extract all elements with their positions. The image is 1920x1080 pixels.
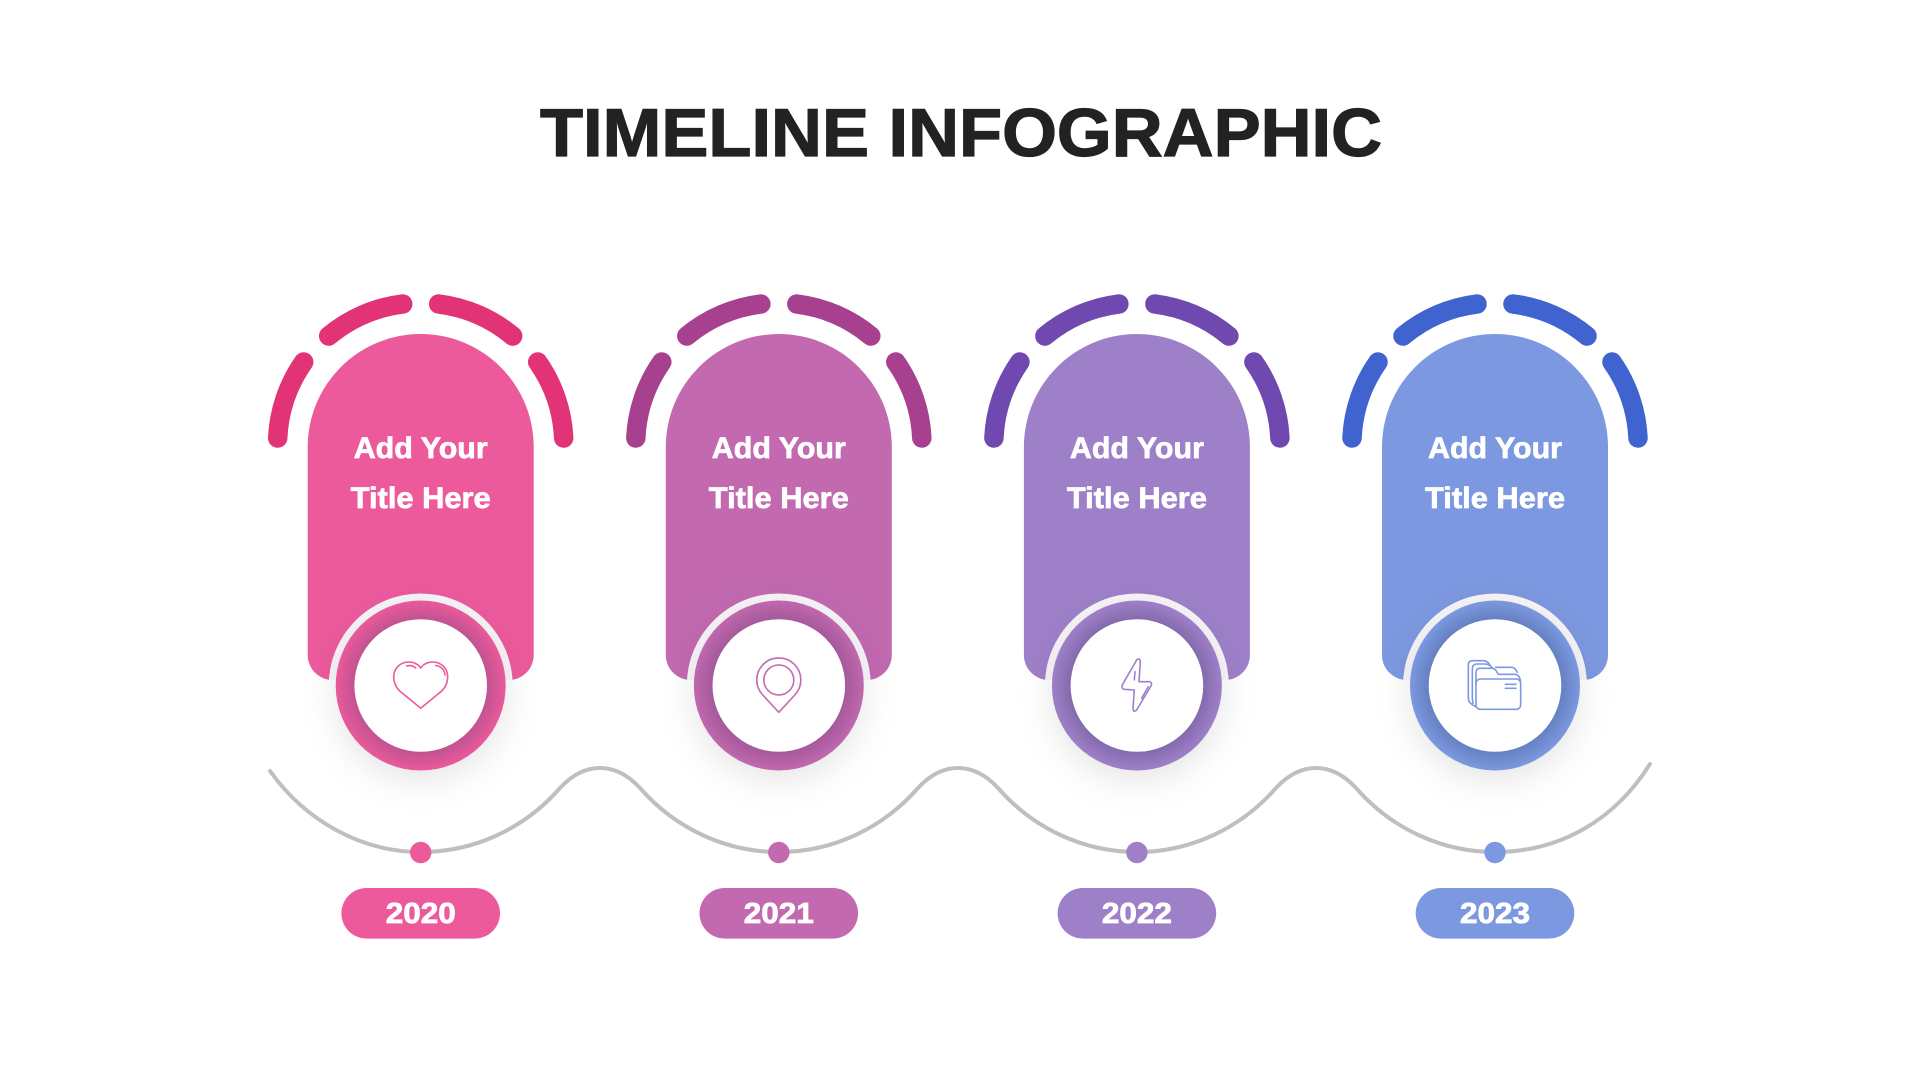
icon: map pin	[757, 658, 801, 712]
icon: heart	[394, 662, 448, 708]
card: 2020	[308, 334, 534, 680]
timeline dot: 2022	[1126, 842, 1148, 863]
title: TIMELINE INFOGRAPHIC	[540, 95, 1382, 171]
icon: lightning bolt	[1122, 659, 1152, 711]
card title: 2022: Title Here	[1067, 482, 1207, 515]
year pill: 2022: 2022	[1102, 898, 1172, 930]
card: 2021	[666, 334, 892, 680]
card title: 2021: Add Your	[712, 432, 846, 465]
badge: 2020	[328, 594, 514, 790]
badge: 2021	[686, 594, 872, 790]
card title: 2023: Add Your	[1428, 432, 1562, 465]
card title: 2020	[351, 432, 491, 515]
year pill: 2023	[1416, 888, 1574, 939]
year pill: 2023: 2023	[1460, 898, 1530, 930]
arcs: 2020	[278, 304, 564, 438]
year pill: 2021: 2021	[744, 898, 814, 930]
year pill: 2020: 2020	[386, 898, 456, 930]
year pill: 2020	[341, 888, 500, 939]
panel: 2020	[278, 304, 564, 939]
arcs: 2023	[1352, 304, 1638, 438]
card title: 2023: Title Here	[1425, 482, 1565, 515]
timeline dot: 2023	[1484, 842, 1506, 863]
badge: 2022	[1044, 594, 1230, 790]
timeline curve	[270, 764, 1650, 852]
panel: 2023	[1352, 304, 1638, 939]
card title: 2021	[709, 432, 849, 515]
card title: 2022: Add Your	[1070, 432, 1204, 465]
card title: 2022	[1067, 432, 1207, 515]
card title: 2020: Add Your	[354, 432, 488, 465]
icon: folders	[1468, 661, 1521, 709]
panel: 2021	[636, 304, 922, 939]
arcs: 2021	[636, 304, 922, 438]
timeline dot: 2021	[768, 842, 790, 863]
year pill: 2021	[700, 888, 858, 939]
arcs: 2022	[994, 304, 1280, 438]
card: 2022	[1024, 334, 1250, 680]
card title: 2023	[1425, 432, 1565, 515]
card: 2023	[1382, 334, 1608, 680]
card title: 2020: Title Here	[351, 482, 491, 515]
panel: 2022	[994, 304, 1280, 939]
timeline dot: 2020	[410, 842, 431, 863]
card title: 2021: Title Here	[709, 482, 849, 515]
year pill: 2022	[1058, 888, 1216, 939]
badge: 2023	[1402, 594, 1588, 790]
